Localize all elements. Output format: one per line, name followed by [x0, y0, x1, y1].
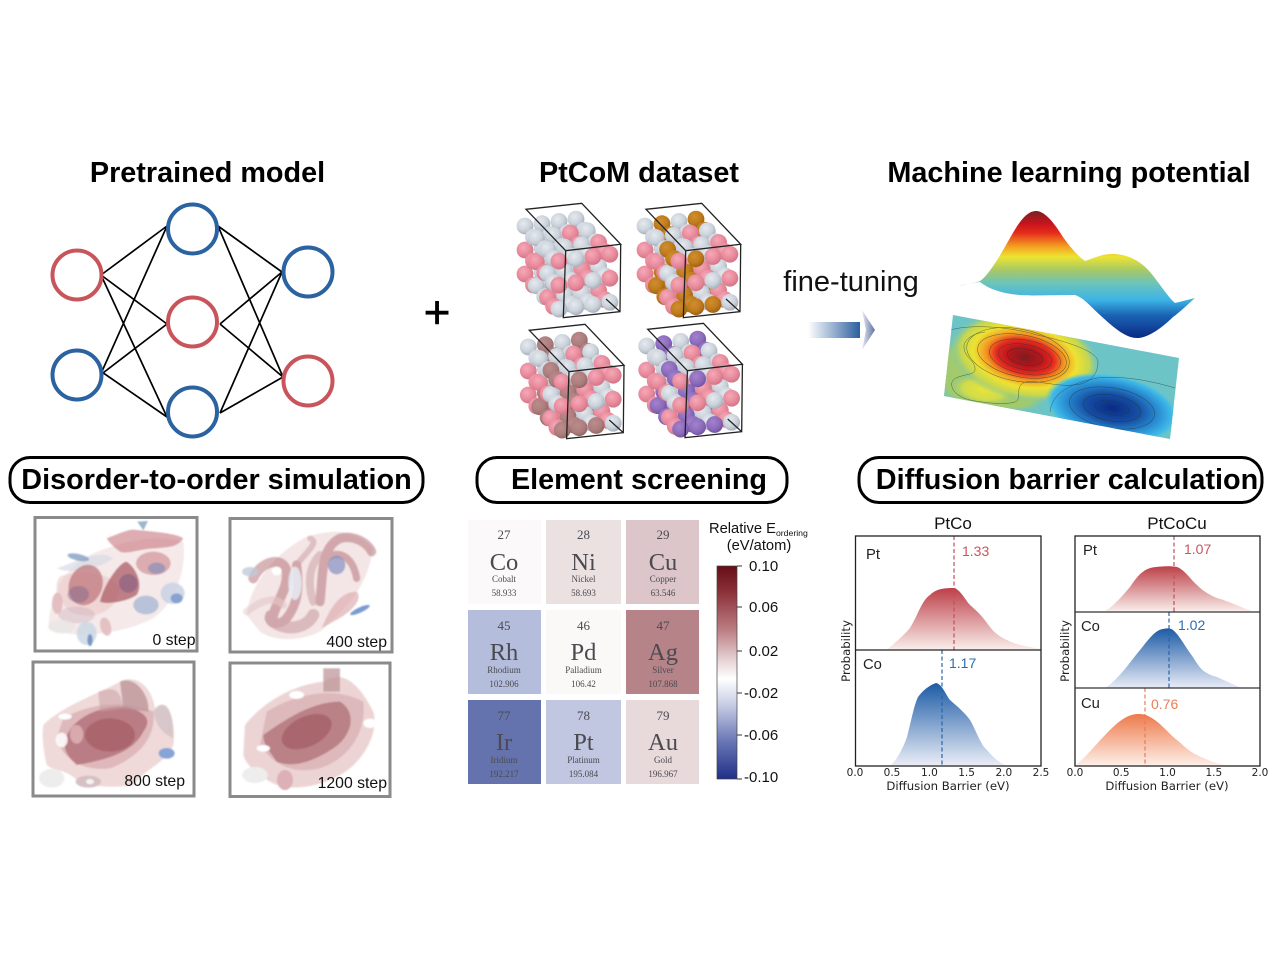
crystal: Pt-Co — [517, 203, 621, 318]
chart: PtCo diffusion barrier: PtCo — [934, 514, 972, 533]
cell: Ni: 58.693 — [571, 588, 596, 598]
chart: PtCoCu diffusion barrier — [1058, 514, 1268, 793]
pill heading: Disorder-to-order simulation — [10, 458, 423, 502]
snapshot: 0 step — [35, 518, 197, 651]
chart: PtCoCu diffusion barrier: Cu — [1081, 696, 1100, 712]
cell: Ag — [626, 610, 699, 694]
cell: Pd: 106.42 — [571, 679, 596, 689]
chart: PtCo diffusion barrier: 1.0 — [921, 767, 938, 779]
chart: PtCo diffusion barrier: 0.5 — [884, 767, 900, 779]
section: machine learning potential — [887, 157, 1251, 453]
cell: Ir: 192.217 — [489, 769, 519, 779]
panel: periodic table heat map — [468, 520, 699, 784]
cell: Pt: 78 — [577, 708, 590, 723]
cell: Pd: 46 — [577, 618, 590, 633]
cell: Pt — [546, 700, 621, 784]
cell: Pt: 195.084 — [569, 769, 599, 779]
chart: PtCoCu diffusion barrier: Co — [1081, 619, 1100, 635]
chart: PtCo diffusion barrier: 1.17 — [949, 655, 976, 671]
plus sign: + — [424, 286, 450, 338]
chart: PtCo diffusion barrier: Diffusion Barrier (eV) — [886, 779, 1010, 793]
chart: PtCoCu diffusion barrier: 1.02 — [1178, 617, 1205, 633]
legend: colour bar: Relative E — [709, 521, 776, 537]
chart: 3D potential energy surface — [958, 211, 1195, 338]
cell: Ir: 77 — [498, 708, 511, 723]
chart: PtCoCu diffusion barrier: 1.0 — [1159, 767, 1176, 779]
pill heading: Disorder-to-order simulation: Disorder-to-order simulation — [21, 464, 412, 496]
cell: Cu: Cu — [649, 549, 677, 576]
crystal: Pt-Co-Rh — [520, 324, 624, 439]
cell: Ir: Ir — [496, 729, 512, 756]
arrow: fine-tuning — [808, 310, 875, 350]
snapshot: 0 step: 0 step — [152, 632, 196, 649]
cell: Pt: Platinum — [567, 755, 600, 765]
legend: colour bar: ordering — [776, 528, 808, 538]
legend: colour bar: -0.02 — [744, 685, 778, 702]
chart: PtCoCu diffusion barrier: 0.76 — [1151, 696, 1178, 712]
legend: colour bar: 0.10 — [749, 558, 778, 575]
legend: colour bar: 0.06 — [749, 599, 778, 616]
cell: Cu: 63.546 — [651, 588, 676, 598]
cell: Ag: Ag — [648, 639, 678, 666]
cell: Co — [468, 520, 541, 604]
cell: Au: Au — [648, 729, 678, 756]
section: pretrained model — [52, 157, 332, 436]
chart: 2D contour map — [944, 315, 1179, 439]
cell: Ir — [468, 700, 541, 784]
chart: PtCo diffusion barrier: 1.33 — [962, 543, 989, 559]
cell: Rh: 45 — [498, 618, 510, 633]
chart: PtCoCu diffusion barrier: 1.5 — [1205, 767, 1222, 779]
chart: PtCoCu diffusion barrier: Diffusion Barrier (eV) — [1105, 779, 1229, 793]
chart: PtCo diffusion barrier: 2.0 — [995, 767, 1012, 779]
pill heading: Diffusion barrier calculation: Diffusion barrier calculation — [876, 464, 1258, 496]
chart: PtCoCu diffusion barrier: 0.5 — [1113, 767, 1130, 779]
cell: Ni — [546, 520, 621, 604]
snapshot: 800 step — [33, 662, 194, 796]
snapshot: 1200 step: 1200 step — [318, 775, 387, 792]
pill heading: Diffusion barrier calculation — [859, 458, 1262, 502]
cell: Rh — [468, 610, 541, 694]
crystal: Pt-Co-Cu — [637, 203, 741, 318]
cell: Co: Cobalt — [492, 574, 516, 584]
chart: PtCoCu diffusion barrier: Probability — [1058, 620, 1072, 682]
cell: Pd: Pd — [571, 639, 596, 666]
panel: simulation snapshots — [33, 518, 392, 796]
chart: PtCo diffusion barrier — [839, 514, 1049, 793]
section: PtCoM dataset — [517, 157, 742, 439]
diagram: neural network — [52, 204, 332, 436]
chart: PtCo diffusion barrier: 2.5 — [1033, 767, 1049, 779]
legend: colour bar: 0.02 — [749, 643, 778, 660]
snapshot: 1200 step — [230, 663, 390, 796]
chart: PtCo diffusion barrier: 1.5 — [958, 767, 975, 779]
cell: Rh: Rh — [490, 639, 518, 666]
cell: Ag: 47 — [656, 618, 670, 633]
cell: Au: 196.967 — [648, 769, 678, 779]
crystal: Pt-Co-Ir — [638, 323, 742, 438]
heading: PtCoM dataset: PtCoM dataset — [539, 157, 739, 189]
label: fine-tuning: fine-tuning — [783, 266, 919, 298]
cell: Ag: Silver — [652, 665, 674, 675]
cell: Pt: Pt — [573, 729, 594, 756]
cell: Ni: Ni — [571, 549, 596, 576]
chart: PtCo diffusion barrier: Probability — [839, 620, 853, 682]
chart: PtCo diffusion barrier: 0.0 — [847, 767, 863, 779]
cell: Ag: 107.868 — [648, 679, 678, 689]
cell: Au: Gold — [654, 755, 672, 765]
chart: PtCo diffusion barrier: Pt — [866, 547, 880, 563]
cell: Au — [626, 700, 699, 784]
chart: PtCoCu diffusion barrier: 1.07 — [1184, 541, 1211, 557]
snapshot: 400 step — [230, 518, 392, 652]
chart: PtCoCu diffusion barrier: Pt — [1083, 543, 1097, 559]
snapshot: 400 step: 400 step — [326, 634, 387, 651]
cell: Pd — [546, 610, 621, 694]
chart: PtCoCu diffusion barrier: 2.0 — [1252, 767, 1268, 779]
cell: Au: 79 — [656, 708, 670, 723]
cell: Rh: Rhodium — [487, 665, 521, 675]
heading: Pretrained model: Pretrained model — [90, 157, 325, 189]
cell: Co: Co — [490, 549, 518, 576]
snapshot: 800 step: 800 step — [124, 773, 185, 790]
cell: Cu: 29 — [656, 527, 670, 542]
legend: colour bar: -0.10 — [744, 769, 778, 786]
legend: colour bar — [709, 521, 808, 786]
cell: Cu: Copper — [650, 574, 676, 584]
chart: PtCoCu diffusion barrier: PtCoCu — [1147, 514, 1207, 533]
pill heading: Element screening: Element screening — [511, 464, 767, 496]
pill heading: Element screening — [477, 458, 787, 502]
legend: colour bar: (eV/atom) — [727, 538, 791, 554]
cell: Ir: Iridium — [490, 755, 518, 765]
cell: Co: 27 — [498, 527, 511, 542]
cell: Ni: Nickel — [572, 574, 596, 584]
cell: Co: 58.933 — [492, 588, 517, 598]
cell: Ni: 28 — [577, 527, 590, 542]
cell: Rh: 102.906 — [489, 679, 519, 689]
chart: PtCo diffusion barrier: Co — [863, 657, 882, 673]
legend: colour bar: -0.06 — [744, 727, 778, 744]
chart: PtCoCu diffusion barrier: 0.0 — [1067, 767, 1083, 779]
cell: Pd: Palladium — [565, 665, 602, 675]
heading: Machine learning potential: Machine learning potential — [887, 157, 1251, 189]
cell: Cu — [626, 520, 699, 604]
